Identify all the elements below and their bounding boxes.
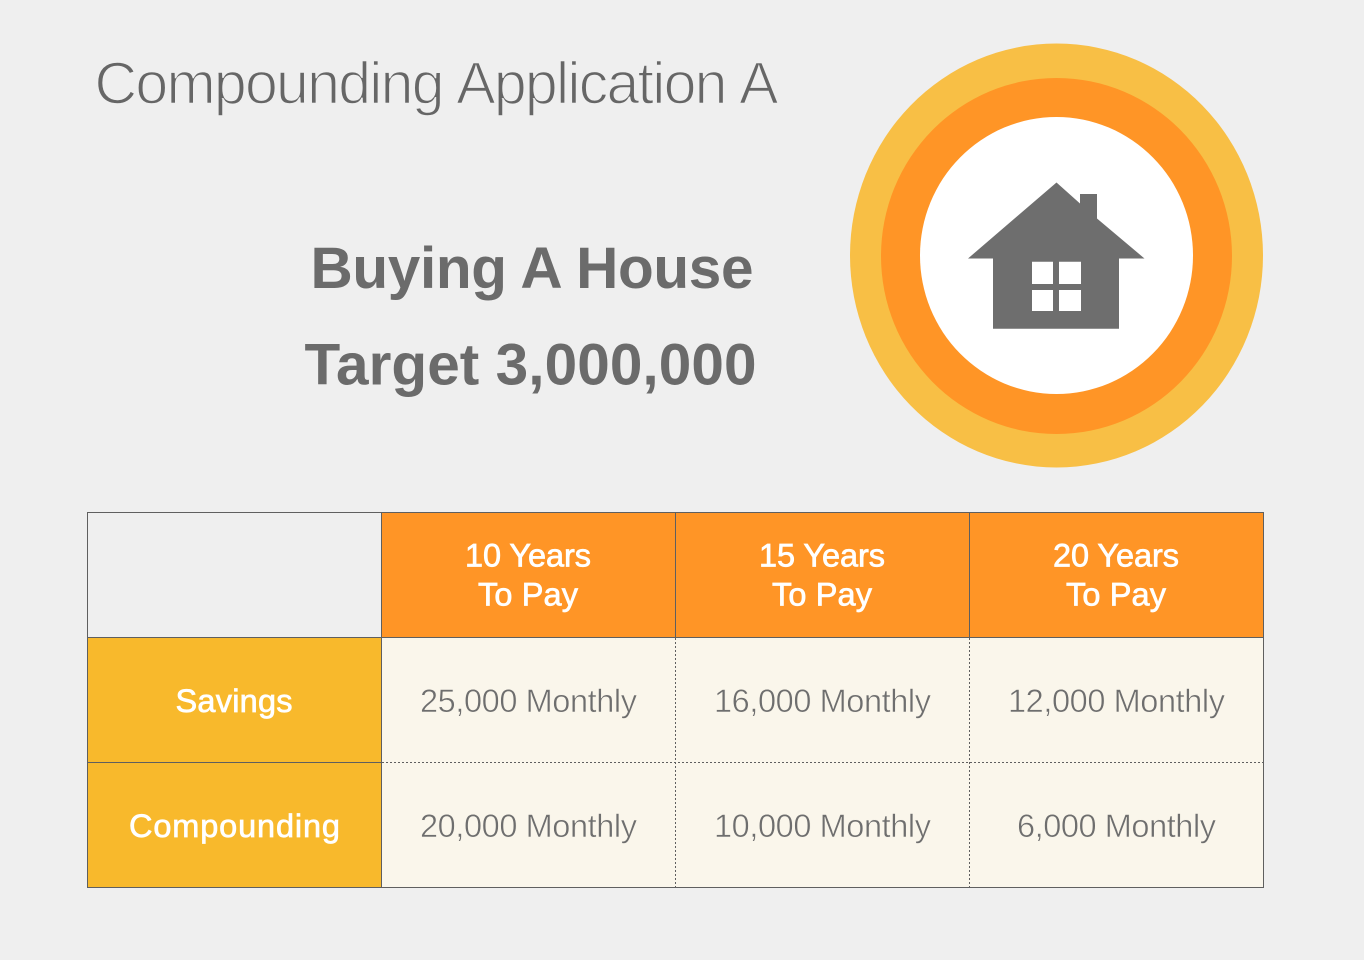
column header: 20 years: To Pay (1066, 576, 1167, 612)
heading: buying a house: Buying A House (310, 236, 754, 301)
column header: 20 years: 20 Years (1053, 538, 1179, 574)
column header: 10 years: To Pay (478, 576, 579, 612)
column header: 15 years (759, 538, 885, 612)
row header: compounding: Compounding (129, 808, 340, 844)
column header: 10 years (465, 538, 591, 612)
cell: compounding 20 years: 6,000 Monthly (1017, 808, 1217, 844)
cell: savings 20 years: 12,000 Monthly (1008, 683, 1226, 719)
cell: savings 15 years: 16,000 Monthly (714, 683, 932, 719)
row header: savings: Savings (176, 683, 292, 719)
cell: compounding 10 years: 20,000 Monthly (420, 808, 638, 844)
heading: target amount: Target 3,000,000 (304, 332, 756, 398)
column header: 15 years: To Pay (772, 576, 873, 612)
title: Compounding Application A (94, 50, 779, 116)
cell: savings 10 years: 25,000 Monthly (420, 683, 638, 719)
icon: house in concentric circles (850, 44, 1263, 468)
cell: compounding 15 years: 10,000 Monthly (714, 808, 932, 844)
comparison table (88, 512, 1264, 888)
column header: 15 years: 15 Years (759, 538, 885, 574)
column header: 10 years: 10 Years (465, 538, 591, 574)
column header: 20 years (1053, 538, 1179, 612)
